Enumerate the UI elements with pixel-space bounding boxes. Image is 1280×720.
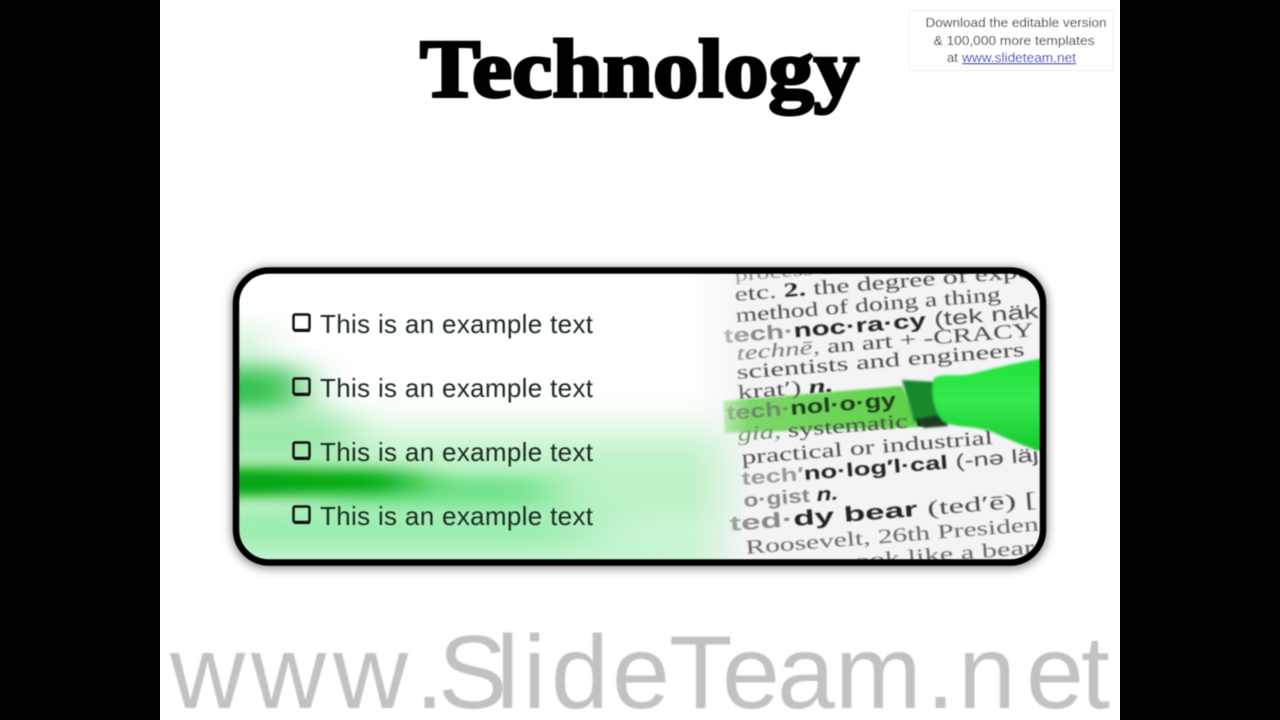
panel drop shadow — [232, 268, 1047, 568]
highlighter stroke band — [723, 386, 920, 433]
dictionary text: scientists and engineers — [736, 339, 1026, 384]
dictionary text: ook like a bear — [854, 537, 1035, 573]
download notice box: www.slideteam.net — [961, 50, 1076, 65]
dictionary text: ted· dy bear (ted′ē) [ — [728, 487, 1037, 536]
panel background gradient — [238, 273, 1040, 560]
dictionary text: tech′ no·log′l·cal (-nə läj — [741, 445, 1039, 490]
dictionary text: o·gist n. — [743, 483, 839, 512]
list item 1: This is an example text — [320, 309, 594, 339]
dictionary text — [723, 273, 1040, 560]
list item 2: This is an example text — [320, 373, 594, 403]
dictionary text: krat′) n. — [737, 374, 834, 404]
dictionary text: method of doing a thing — [735, 284, 1002, 327]
panel black border — [236, 270, 1043, 562]
icon: highlighter marker — [902, 358, 1045, 452]
dictionary text: gia, systematic tr — [737, 408, 938, 446]
panel: technology text panel — [232, 266, 1047, 566]
download notice box: at — [947, 50, 958, 65]
dictionary text: practical or industrial — [741, 427, 994, 469]
white slide background — [160, 0, 1120, 720]
dictionary text: tech· nol·o·gy — [726, 389, 898, 425]
dictionary text: process of the degree of exp — [734, 242, 1029, 285]
dictionary text: Roosevelt, 26th Presiden — [745, 513, 1039, 559]
dictionary text: tech· noc·ra·cy (tek näk — [723, 301, 1041, 348]
bullet list — [294, 309, 594, 531]
dictionary text: technē, an art + -CRACY — [736, 319, 1034, 365]
download notice box — [910, 10, 1114, 70]
title: Technology — [420, 22, 859, 114]
download notice box: Download the editable version — [926, 15, 1106, 30]
list item 3: This is an example text — [320, 437, 594, 467]
dictionary page photo — [700, 273, 1041, 560]
download notice box: & 100,000 more templates — [934, 33, 1095, 48]
dictionary text: etc. 2. the degree of expe — [734, 260, 1032, 306]
list item 4: This is an example text — [320, 501, 594, 531]
